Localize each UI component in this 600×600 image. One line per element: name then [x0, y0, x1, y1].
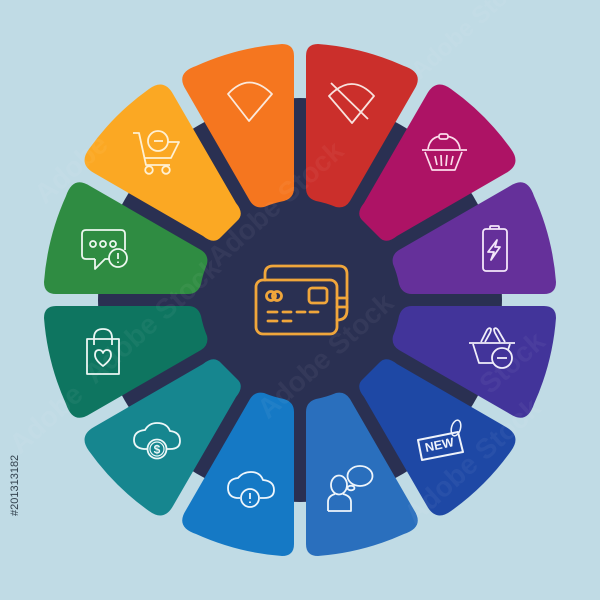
icon: basket remove: [469, 328, 515, 368]
icon: chat alert: [82, 230, 127, 269]
watermark: Adobe Stock: [78, 252, 227, 389]
icon: cart remove: [133, 131, 179, 174]
segment: green: [44, 182, 207, 294]
segment: teal: [85, 359, 241, 515]
segment: yellow: [85, 85, 241, 241]
segment: blue left: [182, 393, 294, 556]
icon: wifi: [228, 82, 272, 121]
segment: magenta: [359, 85, 515, 241]
icon: wifi off: [329, 83, 374, 123]
segment: purple: [393, 182, 556, 294]
segment: navy: [359, 359, 515, 515]
watermark: Stock: [473, 325, 551, 399]
icon: cloud money: [134, 423, 180, 458]
segment: blue right: [306, 393, 418, 556]
watermark: Adobe Stock: [398, 392, 547, 529]
stock image number: #201313182: [9, 455, 21, 516]
watermark: Adobe: [28, 128, 114, 209]
icon: new tag: NEW: [424, 435, 455, 455]
icon: basket with handle: [422, 134, 467, 170]
icon: cloud alert: [228, 472, 274, 507]
dark central disc: [98, 98, 502, 502]
icon: battery charging: [483, 226, 507, 271]
icon: person thinking: [328, 466, 372, 511]
icon: new tag: [418, 419, 463, 460]
icon: shopping bag heart: [87, 329, 119, 374]
icon: cloud money: $: [154, 442, 161, 456]
segment: indigo: [393, 306, 556, 418]
watermark: Adobe Stock: [251, 287, 400, 424]
icon: credit cards: [256, 266, 347, 334]
watermark: Adobe Stock: [201, 135, 350, 272]
segment: orange: [182, 44, 294, 207]
segment: red: [306, 44, 418, 207]
watermark: Adobe: [3, 378, 89, 459]
segment: dark green: [44, 306, 207, 418]
